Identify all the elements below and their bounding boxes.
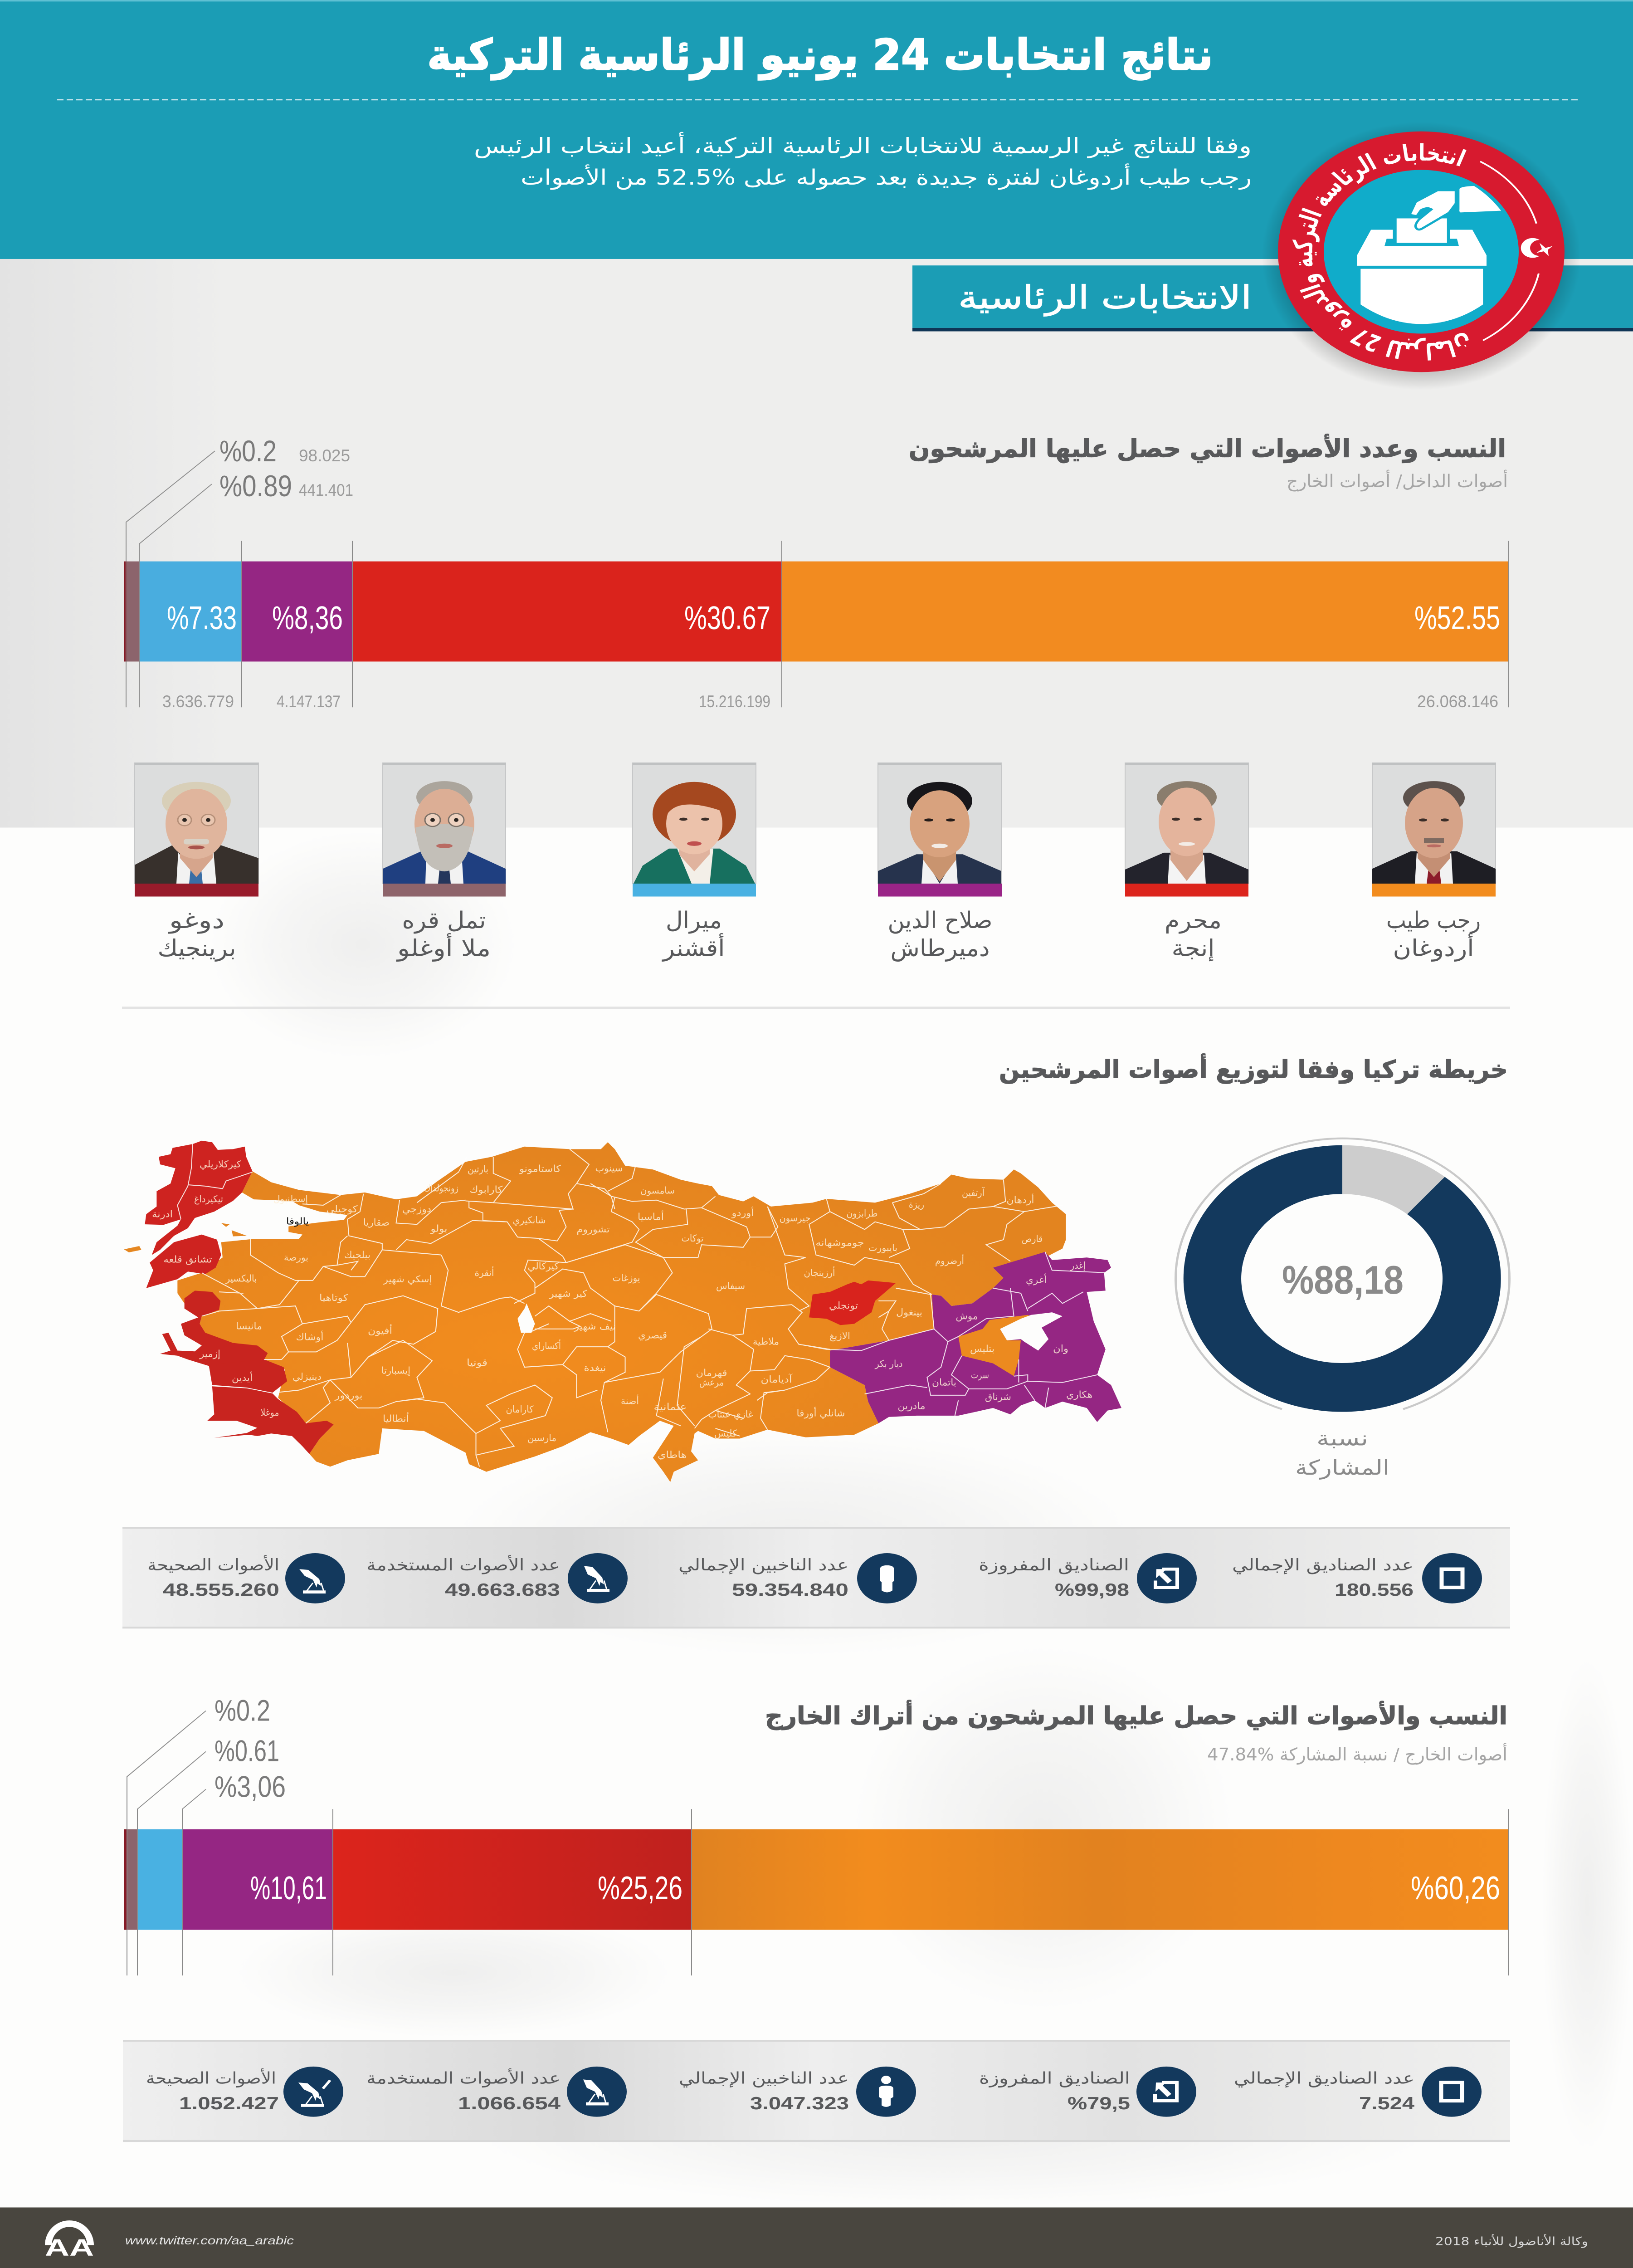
map labels: سينوب	[595, 1163, 623, 1174]
map labels: شرناق	[985, 1392, 1011, 1403]
map labels: إغدر	[1070, 1261, 1086, 1271]
map labels: قونيا	[467, 1358, 487, 1368]
map labels: هكاري	[1066, 1389, 1092, 1400]
header band	[0, 0, 1633, 259]
map labels: نيف شهير	[574, 1321, 616, 1332]
map labels: كارابوك	[470, 1185, 503, 1195]
candidate: Erdogan: رجب طيب	[1386, 908, 1481, 934]
stat: total boxes: 180.556	[1335, 1580, 1414, 1599]
stacked bar: votes abroad: %60,26	[1411, 1870, 1500, 1906]
footer credit: وكالة الأناضول للأنباء 2018	[1435, 2234, 1588, 2248]
candidate: Erdogan	[1372, 763, 1496, 962]
map labels: طرابزون	[846, 1208, 877, 1219]
stat: votes used: عدد الأصوات المستخدمة	[366, 1555, 560, 1574]
map labels: جيرسون	[779, 1213, 810, 1224]
map labels: الازيغ	[829, 1331, 850, 1342]
intro text	[474, 132, 1252, 190]
icon: AA logo	[45, 2220, 94, 2261]
icon: AA logo: AA	[45, 2234, 94, 2261]
candidate: Karamollaoglu	[383, 763, 506, 962]
map labels: كارامان	[506, 1404, 534, 1415]
map labels: أرزينجان	[804, 1266, 835, 1278]
candidate: Perincek: دوغو	[168, 908, 224, 934]
stat: total voters: 3.047.323	[750, 2093, 849, 2113]
stacked bar: votes abroad: %3,06	[214, 1770, 286, 1804]
map labels: بورصة	[284, 1252, 308, 1263]
map labels: قهرمان	[696, 1368, 727, 1378]
stat: total voters: 59.354.840	[732, 1580, 848, 1599]
stat: counted boxes	[979, 2067, 1196, 2117]
map labels: سامسون	[640, 1185, 675, 1196]
map labels: كيركلاريلي	[200, 1159, 241, 1170]
stacked bar: domestic and abroad votes: 15.216.199	[699, 692, 770, 711]
stacked bar: domestic and abroad votes: %52.55	[1414, 600, 1500, 636]
stat: valid votes: الأصوات الصحيحة	[147, 1555, 279, 1574]
stat: total boxes	[1232, 1553, 1482, 1603]
map labels: بايبورت	[868, 1243, 897, 1254]
heading: map: خريطة تركيا وفقا لتوزيع أصوات المرشحين	[999, 1054, 1508, 1084]
stat: counted boxes	[979, 1553, 1197, 1603]
stat: counted boxes: %79,5	[1068, 2093, 1130, 2113]
map labels	[152, 1159, 1092, 1461]
map labels: مارسين	[527, 1433, 556, 1444]
map labels: قيصري	[638, 1330, 667, 1341]
map labels: أماسيا	[638, 1210, 664, 1222]
stacked bar: votes abroad: %0.2	[214, 1694, 270, 1727]
map labels: نيغدة	[584, 1363, 606, 1374]
stats panel: abroad	[123, 2040, 1510, 2142]
map labels: أوردو	[731, 1207, 754, 1218]
map labels: كير شهير	[549, 1289, 587, 1299]
title: نتائج انتخابات 24 يونيو الرئاسية التركية	[427, 30, 1213, 80]
map labels: ديار بكر	[875, 1359, 902, 1369]
candidate: Demirtas	[878, 763, 1002, 962]
stacked bar: domestic and abroad votes: %30.67	[684, 600, 770, 636]
map labels: تيكيرداغ	[194, 1194, 223, 1205]
stat: votes used: 1.066.654	[458, 2093, 561, 2113]
stat: votes used	[366, 2067, 627, 2117]
stat: total voters: عدد الناخبين الإجمالي	[678, 1556, 848, 1574]
stacked bar: domestic and abroad votes	[124, 435, 1509, 711]
candidate: Perincek	[135, 763, 258, 962]
map labels: مرعش	[699, 1377, 724, 1388]
stat: valid votes: 48.555.260	[163, 1580, 279, 1599]
map labels: بولو	[430, 1223, 447, 1234]
map labels: صقاريا	[363, 1217, 390, 1228]
stat: counted boxes: الصناديق المفروزة	[979, 2069, 1130, 2088]
stacked bar: votes abroad: %25,26	[598, 1870, 682, 1906]
map labels: مادرين	[897, 1401, 925, 1412]
map labels: بارتين	[468, 1164, 488, 1175]
map labels: أوشاك	[296, 1331, 324, 1343]
map labels: توكات	[681, 1233, 703, 1244]
candidate: Aksener: أقشنر	[662, 933, 725, 962]
map labels: أرضروم	[935, 1255, 964, 1266]
badge: election emblem	[1262, 122, 1581, 390]
map labels: بينغول	[896, 1307, 922, 1318]
stacked bar: domestic and abroad votes: 3.636.779	[162, 692, 234, 711]
candidate: Karamollaoglu: تمل قره	[402, 908, 486, 934]
map labels: ملاطية	[753, 1337, 779, 1347]
map labels: باليكسير	[225, 1273, 257, 1284]
stacked bar: domestic and abroad votes: 441.401	[299, 481, 353, 499]
stacked bar: domestic and abroad votes: %8,36	[272, 600, 343, 636]
candidate: Erdogan: أردوغان	[1393, 933, 1474, 962]
candidate: Karamollaoglu: ملا أوغلو	[396, 933, 491, 962]
stat: total voters: عدد الناخبين الإجمالي	[679, 2069, 849, 2088]
stat: counted boxes: %99,98	[1055, 1580, 1129, 1599]
map labels: وان	[1053, 1344, 1068, 1354]
map labels: أنقرة	[474, 1266, 494, 1278]
map labels: إيسبارتا	[381, 1365, 410, 1376]
candidate: Aksener	[633, 763, 756, 962]
stat: counted boxes: الصناديق المفروزة	[979, 1556, 1129, 1574]
map labels: تشانق قلعه	[163, 1254, 212, 1265]
map labels: عثمانية	[654, 1402, 687, 1413]
stats panel: domestic	[122, 1527, 1510, 1628]
stacked bar: domestic and abroad votes: 26.068.146	[1417, 692, 1498, 711]
map labels: شانلي أورفا	[796, 1407, 845, 1419]
map labels: موغلا	[260, 1408, 279, 1418]
map labels: جوموشهانه	[815, 1237, 864, 1248]
badge: election emblem: انتخابات الرئاسة التركية والدورة 27 للبرلمان	[1287, 140, 1477, 364]
candidate: Ince: محرم	[1165, 908, 1222, 934]
donut: turnout: %88,18	[1282, 1257, 1404, 1302]
map labels: باتمان	[932, 1377, 956, 1388]
map labels: كاستامونو	[519, 1163, 561, 1174]
map labels: هاطاي	[658, 1450, 687, 1461]
map labels: بوردور	[335, 1390, 363, 1401]
donut: turnout: المشاركة	[1295, 1456, 1389, 1480]
map labels: آرتفين	[962, 1187, 985, 1198]
stat: total boxes: عدد الصناديق الإجمالي	[1234, 2069, 1414, 2088]
map labels: بيلجيك	[344, 1250, 370, 1261]
candidate: Ince: إنجة	[1172, 935, 1215, 962]
map labels: أيدين	[232, 1372, 253, 1383]
stacked bar: domestic and abroad votes: %7.33	[167, 600, 237, 636]
map labels: ريزة	[909, 1199, 924, 1210]
map labels: كوتاهيا	[319, 1293, 348, 1304]
footer	[0, 2207, 1633, 2268]
stacked bar: domestic and abroad votes: %0.2	[219, 435, 277, 468]
stacked bar: domestic and abroad votes: 4.147.137	[277, 692, 341, 711]
candidate: Demirtas: دميرطاش	[891, 935, 990, 962]
stat: votes used	[366, 1553, 628, 1603]
map labels: شانكيري	[512, 1215, 546, 1226]
stat: valid votes	[146, 2067, 343, 2117]
candidate: Aksener: ميرال	[666, 908, 722, 934]
stacked bar: votes abroad: %10,61	[250, 1870, 327, 1906]
map labels: زونجولداك	[424, 1183, 458, 1194]
map labels: تونجلي	[829, 1300, 858, 1311]
map labels: أضنة	[621, 1395, 639, 1407]
map labels: أنطاليا	[383, 1412, 409, 1424]
map labels: سيفاس	[716, 1281, 745, 1292]
subheading: أصوات الداخل/ أصوات الخارج	[1287, 469, 1508, 492]
map of Turkey	[124, 1141, 1121, 1482]
footer link: www.twitter.com/aa_arabic	[125, 2234, 294, 2247]
map labels: غازي عنتاب	[708, 1409, 753, 1420]
intro text: رجب طيب أردوغان لفترة جديدة بعد حصوله على %52.5 من الأصوات	[521, 163, 1252, 190]
map labels: إسكي شهير	[383, 1274, 432, 1285]
map labels: دوزجي	[402, 1204, 431, 1215]
map labels: كوجيلي	[326, 1204, 358, 1215]
donut: turnout: نسبة	[1316, 1427, 1368, 1450]
map labels: سرت	[971, 1370, 989, 1381]
stat: votes used: عدد الأصوات المستخدمة	[366, 2068, 561, 2088]
stacked bar: domestic and abroad votes: %0.89	[219, 470, 292, 503]
stat: total voters	[678, 1553, 917, 1603]
map labels: آديامان	[760, 1374, 793, 1385]
stat: votes used: 49.663.683	[445, 1580, 560, 1599]
map labels: أفيون	[368, 1324, 392, 1336]
stat: total voters	[679, 2067, 916, 2117]
candidate: Perincek: برينجيك	[158, 935, 236, 962]
map labels: أردهان	[1006, 1193, 1034, 1206]
map labels: كليس	[714, 1428, 737, 1439]
map labels: كيركالي	[528, 1261, 559, 1272]
stat: valid votes: 1.052.427	[179, 2093, 279, 2113]
map labels: إسطنبول	[273, 1194, 308, 1204]
stat: total boxes	[1234, 2067, 1482, 2117]
map labels: قارص	[1022, 1234, 1043, 1244]
candidate: Demirtas: صلاح الدين	[888, 908, 993, 934]
map labels: دينيزلي	[292, 1372, 322, 1382]
stacked bar: votes abroad	[124, 1694, 1508, 1975]
map labels: بتليس	[970, 1344, 994, 1354]
map labels: موش	[955, 1311, 978, 1322]
map labels: أغري	[1026, 1274, 1047, 1286]
section ribbon	[912, 265, 1633, 331]
stacked bar: domestic and abroad votes: 98.025	[299, 446, 350, 465]
stat: valid votes	[147, 1553, 345, 1603]
map labels: يالوفا	[286, 1216, 309, 1227]
map labels: ادرنة	[152, 1209, 173, 1220]
stat: total boxes: عدد الصناديق الإجمالي	[1232, 1556, 1414, 1574]
heading: candidates votes: النسب وعدد الأصوات التي حصل عليها المرشحون	[909, 434, 1506, 463]
stacked bar: votes abroad: %0.61	[214, 1735, 279, 1768]
map labels: مانيسا	[236, 1321, 262, 1332]
stat: total boxes: 7.524	[1359, 2093, 1414, 2113]
stat: valid votes: الأصوات الصحيحة	[146, 2068, 276, 2088]
map labels: يوزغات	[612, 1273, 640, 1284]
heading: votes abroad: النسب والأصوات التي حصل عليها المرشحون من أتراك الخارج	[765, 1700, 1507, 1730]
map labels: أكساراي	[532, 1339, 561, 1351]
subheading abroad: أصوات الخارج / نسبة المشاركة %47.84	[1207, 1743, 1507, 1765]
donut: turnout	[1175, 1139, 1509, 1480]
candidate: Ince	[1125, 763, 1248, 962]
map labels: تشوروم	[577, 1224, 609, 1235]
intro text: وفقا للنتائج غير الرسمية للانتخابات الرئاسية التركية، أعيد انتخاب الرئيس	[474, 132, 1252, 158]
section ribbon: الانتخابات الرئاسية	[958, 279, 1252, 316]
map labels: إزمير	[199, 1349, 220, 1359]
